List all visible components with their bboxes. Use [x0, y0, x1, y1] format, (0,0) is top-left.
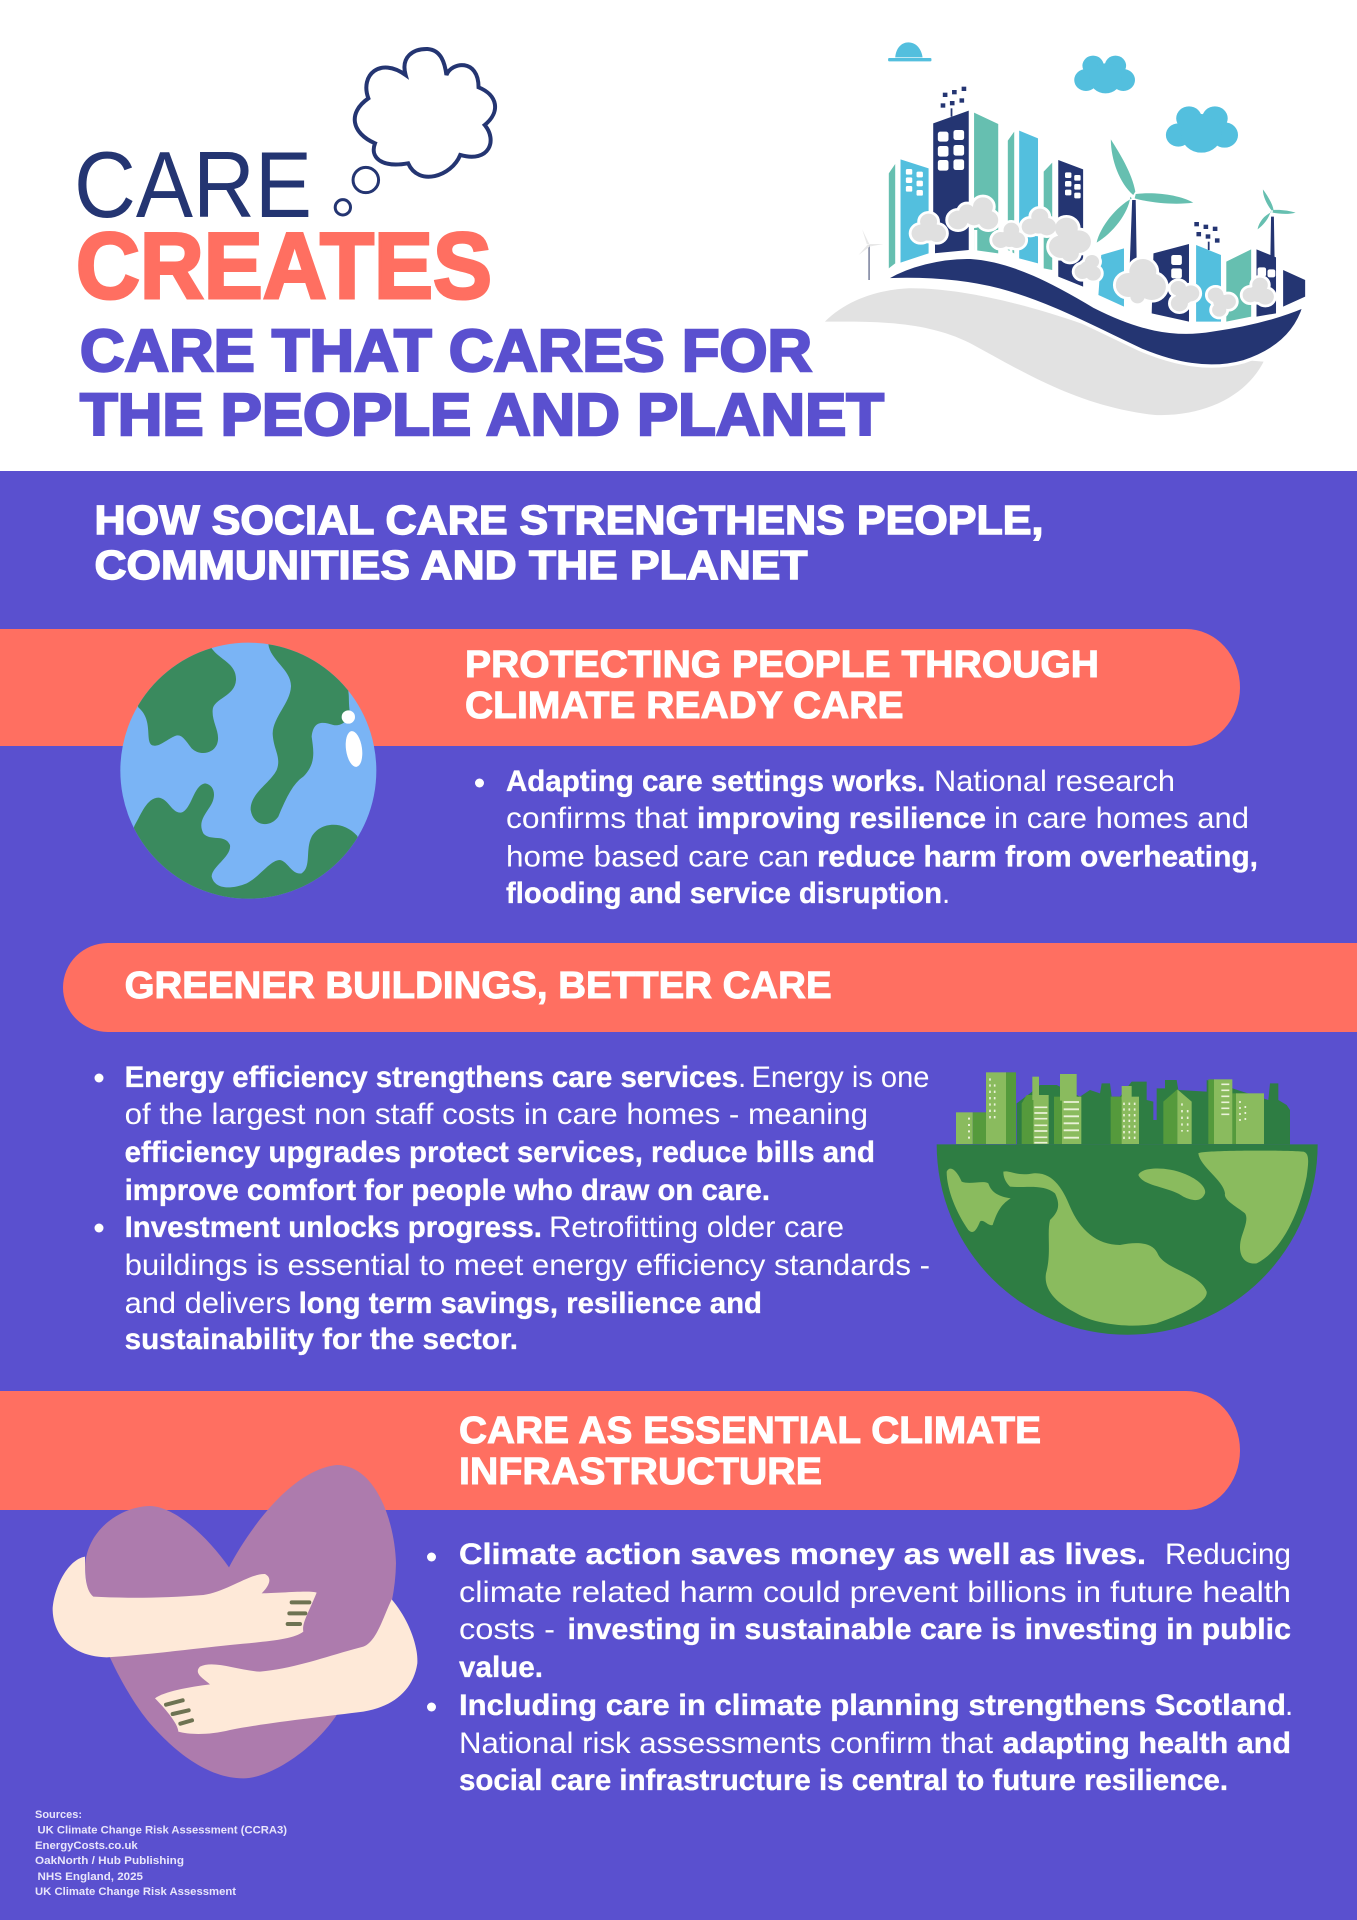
- text block: greener buildings: efficiency upgrades protect services, reduce bills and: [125, 1136, 875, 1169]
- text block: essential climate infrastructure: costs -: [459, 1613, 555, 1646]
- text block: greener buildings: .: [738, 1061, 746, 1094]
- section heading: COMMUNITIES AND THE PLANET: [94, 542, 808, 588]
- building windows: [906, 130, 1275, 278]
- white header background: [0, 0, 1357, 471]
- banner: essential climate infrastructure: [0, 1391, 1240, 1510]
- text block: greener buildings: long term savings, resilience and: [299, 1287, 762, 1320]
- text block: greener buildings: improve comfort for people who draw on care.: [125, 1174, 770, 1207]
- heart: [85, 1465, 396, 1778]
- text block: greener buildings: Energy efficiency strengthens care services: [125, 1061, 738, 1094]
- finger lines: [166, 1602, 309, 1724]
- text block: protecting people: [475, 765, 1258, 910]
- text block: essential climate infrastructure: Reducing: [1165, 1538, 1291, 1571]
- text block: protecting people: National research: [934, 765, 1175, 798]
- sources: NHS England, 2025: [38, 1871, 143, 1883]
- text block: protecting people: Adapting care settings works.: [506, 765, 926, 798]
- heading: essential climate infrastructure: INFRASTRUCTURE: [459, 1451, 822, 1493]
- text block: greener buildings: buildings is essential to meet energy efficiency standards -: [125, 1249, 930, 1282]
- logo word: CARE: CARE: [74, 132, 312, 237]
- sources: UK Climate Change Risk Assessment: [35, 1886, 237, 1898]
- purple body background: [0, 471, 1357, 1920]
- logo: Care Creates: [74, 49, 495, 318]
- hugging arms: [53, 1557, 417, 1734]
- text block: essential climate infrastructure: climate related harm could prevent billions in future health: [459, 1576, 1291, 1609]
- heading: essential climate infrastructure: CARE AS ESSENTIAL CLIMATE: [459, 1410, 1041, 1452]
- text block: essential climate infrastructure: .: [1285, 1689, 1293, 1722]
- small left turbine: [859, 229, 883, 280]
- sources: OakNorth / Hub Publishing: [35, 1855, 184, 1867]
- text block: essential climate infrastructure: adapting health and: [1003, 1727, 1291, 1760]
- text block: protecting people: .: [942, 877, 950, 910]
- text block: greener buildings: [94, 1061, 930, 1356]
- text block: essential climate infrastructure: social care infrastructure is central to future resilience.: [459, 1764, 1228, 1797]
- icon: green half globe with skyline: [937, 1072, 1318, 1335]
- buildings: [889, 87, 1305, 322]
- text block: protecting people: in care homes and: [994, 802, 1249, 835]
- heading: protecting people: PROTECTING PEOPLE THROUGH: [465, 644, 1099, 686]
- title: [80, 318, 884, 448]
- icon: arms hugging a heart: [53, 1465, 417, 1778]
- icon: blue and green globe: [120, 642, 376, 899]
- dark skyline: [1017, 1080, 1290, 1144]
- title: THE PEOPLE AND PLANET: [80, 382, 884, 448]
- text block: greener buildings: of the largest non staff costs in care homes - meaning: [125, 1098, 868, 1131]
- banner: protecting people: [0, 629, 1240, 746]
- text block: greener buildings: and delivers: [125, 1287, 291, 1320]
- text block: greener buildings: Retrofitting older care: [549, 1211, 844, 1244]
- text block: protecting people: flooding and service disruption: [506, 877, 942, 910]
- text block: essential climate infrastructure: Including care in climate planning strengthens Scotland: [459, 1689, 1286, 1722]
- continents: [947, 1151, 1308, 1326]
- panel: protecting people: [0, 629, 1258, 920]
- skyline buildings: [956, 1072, 1264, 1144]
- wind turbines: [1097, 139, 1296, 267]
- section heading: HOW SOCIAL CARE STRENGTHENS PEOPLE,: [94, 497, 1044, 543]
- title: CARE THAT CARES FOR: [80, 318, 812, 384]
- text block: greener buildings: sustainability for the sector.: [125, 1323, 518, 1356]
- sources: UK Climate Change Risk Assessment (CCRA3): [38, 1824, 287, 1836]
- text block: protecting people: improving resilience: [697, 802, 986, 835]
- clouds: [888, 42, 1238, 153]
- sources: EnergyCosts.co.uk: [35, 1840, 138, 1852]
- icon: thought bubble: [335, 49, 495, 215]
- heading: protecting people: CLIMATE READY CARE: [465, 685, 904, 727]
- banner: greener buildings: [63, 943, 1357, 1032]
- text block: greener buildings: Energy is one: [752, 1061, 930, 1094]
- text block: essential climate infrastructure: [427, 1538, 1293, 1797]
- text block: essential climate infrastructure: National risk assessments confirm that: [459, 1727, 993, 1760]
- globe dome: [937, 1144, 1318, 1335]
- trees: [912, 197, 1274, 317]
- grey swoosh: [825, 288, 1264, 415]
- text block: essential climate infrastructure: Climate action saves money as well as lives.: [459, 1538, 1146, 1571]
- sources: Sources:: [35, 1809, 82, 1821]
- rooftop dots: [941, 87, 1220, 250]
- text block: protecting people: home based care can: [506, 840, 809, 874]
- section heading: [94, 497, 1044, 588]
- text block: essential climate infrastructure: investing in sustainable care is investing in public: [568, 1613, 1291, 1646]
- logo word: CREATES: CREATES: [76, 213, 492, 318]
- heading: essential climate infrastructure: [459, 1410, 1041, 1493]
- text block: essential climate infrastructure: value.: [459, 1651, 543, 1684]
- sources: [35, 1809, 287, 1898]
- navy wave: [883, 257, 1304, 366]
- panel: greener buildings: [63, 943, 1357, 1356]
- text block: protecting people: confirms that: [506, 802, 688, 835]
- panel: essential climate infrastructure: [0, 1391, 1293, 1797]
- illustration: sustainable city on a wave: [825, 42, 1305, 415]
- text block: greener buildings: Investment unlocks progress.: [125, 1211, 542, 1244]
- heading: protecting people: [465, 644, 1099, 727]
- heading: greener buildings: GREENER BUILDINGS, BETTER CARE: [125, 965, 832, 1007]
- text block: protecting people: reduce harm from overheating,: [817, 840, 1258, 874]
